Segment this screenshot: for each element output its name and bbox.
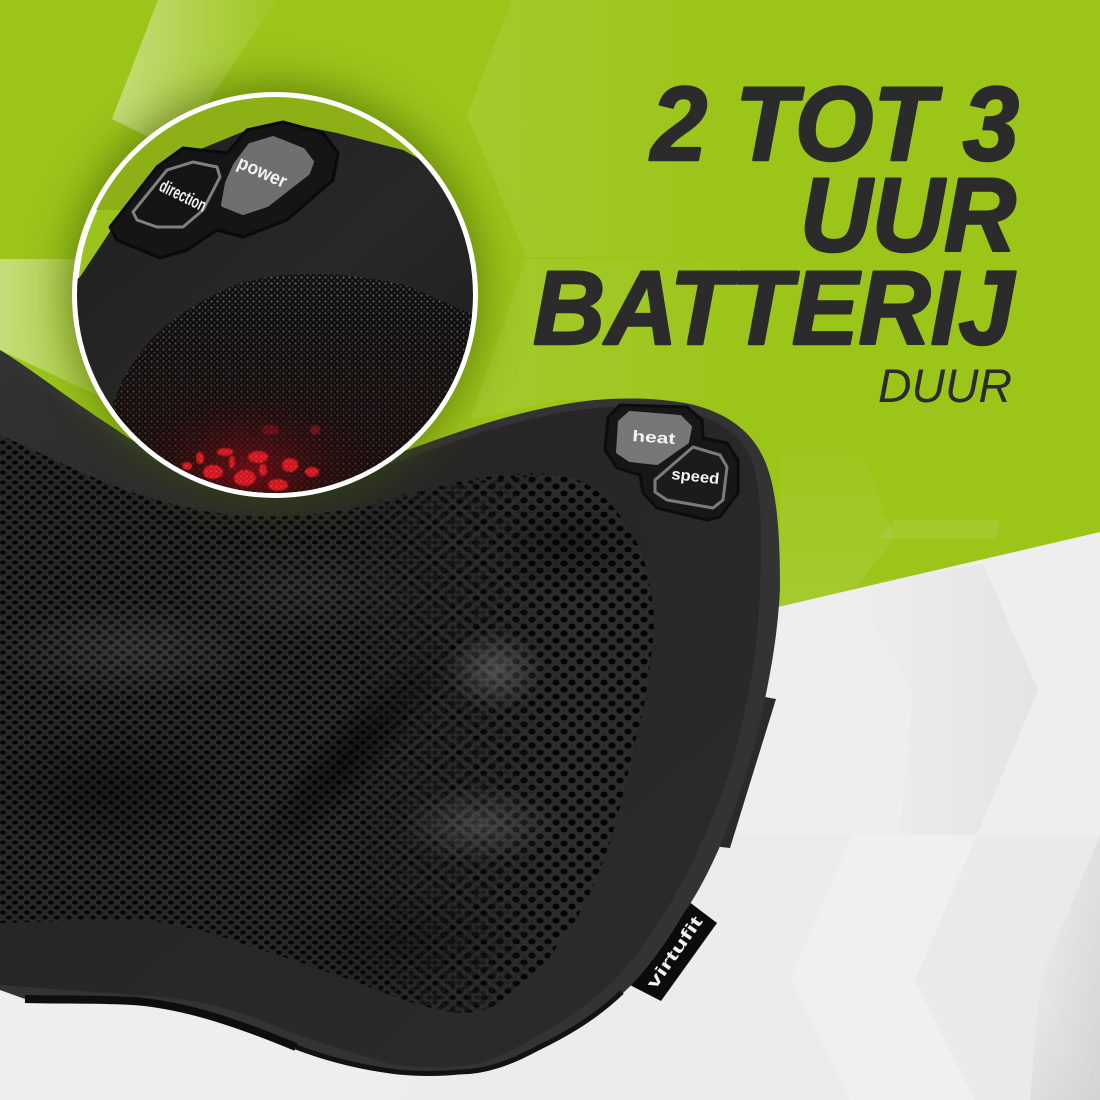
pillow mesh coarse right side (390, 475, 654, 1013)
background: white chevron facets (400, 564, 1100, 1100)
inset mesh area (113, 274, 472, 493)
pillow outer fabric edge (0, 350, 780, 1076)
pillow smooth band (0, 360, 761, 1067)
power button (223, 138, 312, 213)
speed button: speed (671, 466, 720, 488)
mesh light and shadow (0, 495, 650, 995)
inset white ring (75, 95, 475, 495)
button plate (605, 405, 738, 520)
pillow mesh panel (0, 435, 654, 1013)
inset green background (96, 97, 454, 210)
control buttons: heat and speed (605, 405, 738, 520)
background: white lower area (0, 532, 1100, 1100)
inset button plate (110, 122, 338, 258)
inset mesh tint (114, 300, 470, 493)
inset drop shadow (68, 85, 482, 499)
inset pillow dome (77, 126, 473, 493)
pillow bottom seam left (25, 999, 296, 1047)
pillow bottom edge (296, 992, 622, 1074)
heading line 2: UUR (800, 157, 1016, 274)
inset red glow (158, 407, 345, 493)
heading line 1: 2 TOT 3 (649, 66, 1019, 183)
heading line 4: duur: DUUR (878, 359, 1012, 412)
brand label text: virtufit (643, 912, 707, 992)
direction button: direction (156, 176, 210, 216)
inset red lights (182, 425, 320, 491)
power button: power (234, 152, 291, 193)
heading line 3: BATTERIJ (533, 250, 1016, 367)
background: green hexagon facets (0, 0, 1000, 607)
circular detail inset (72, 92, 478, 498)
direction button (133, 162, 220, 227)
heat button: heat (632, 428, 676, 448)
strap on pillow side (712, 697, 776, 848)
massage pillow (0, 350, 780, 1076)
heading (533, 66, 1019, 367)
inset photo content (77, 97, 473, 493)
brand label tag (628, 898, 717, 1001)
